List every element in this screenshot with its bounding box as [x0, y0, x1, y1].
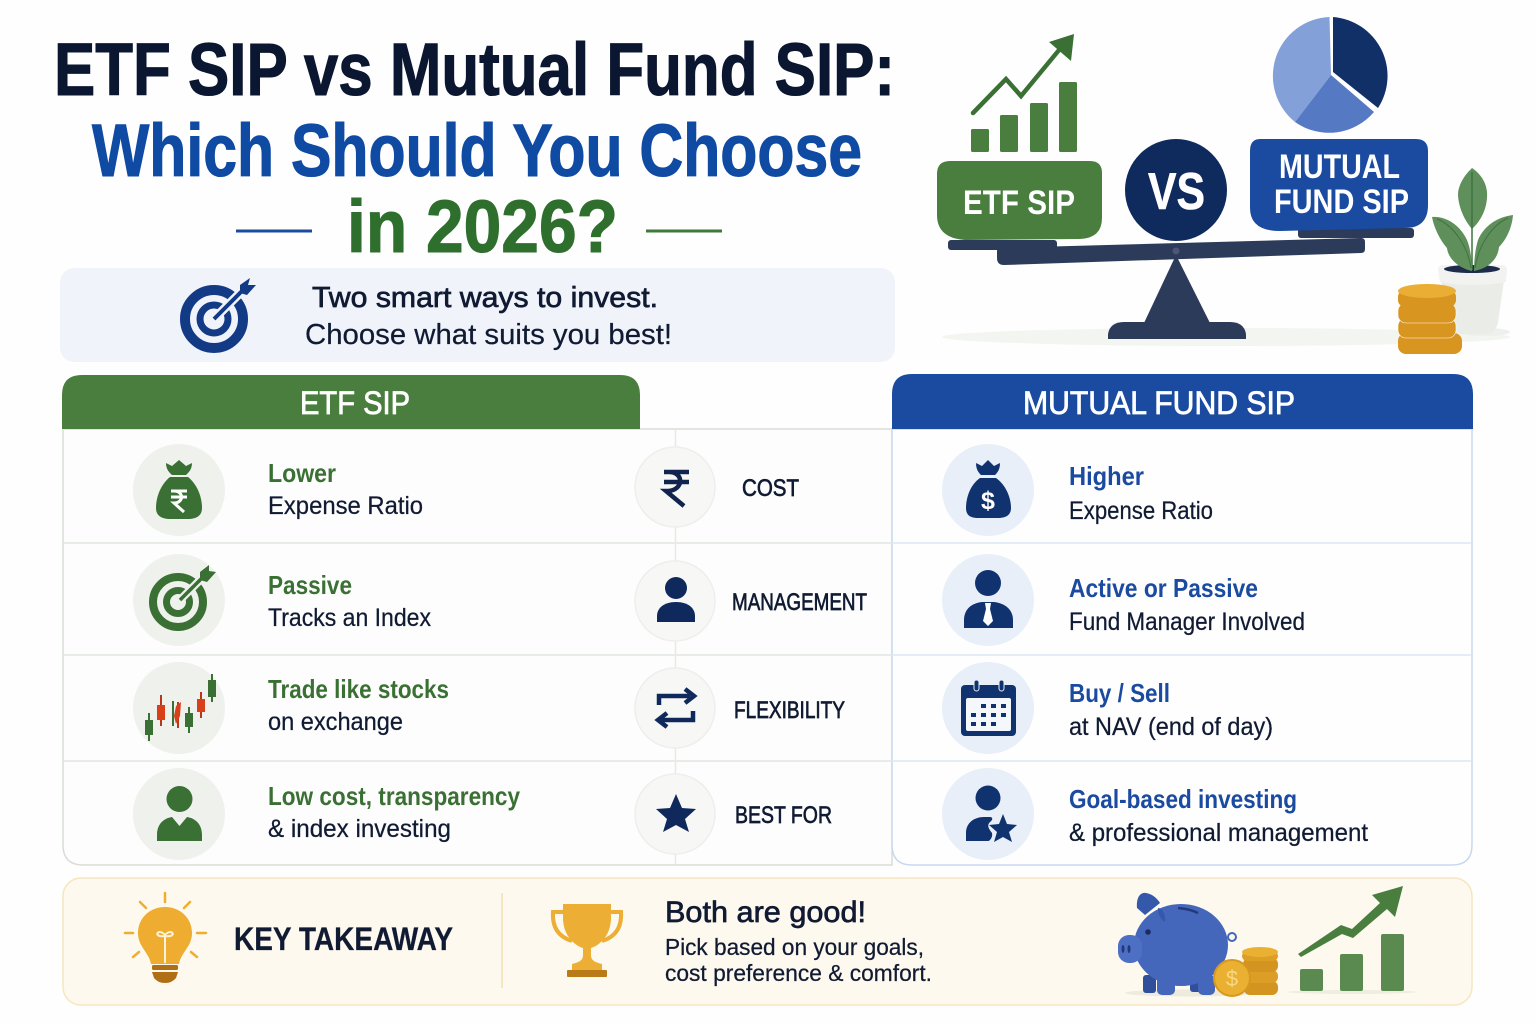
icon: candlesticks — [133, 662, 225, 754]
row: cost, mutual fund: Higher — [1069, 461, 1144, 491]
row: flexibility, mutual fund — [942, 662, 1273, 754]
heading: ETF SIP column — [62, 375, 640, 429]
scale beam — [948, 228, 1414, 339]
icon: rupee — [635, 447, 715, 527]
panel: key takeaway — [63, 878, 1472, 1005]
label: ETF SIP — [937, 161, 1102, 240]
row: management, mutual fund — [942, 554, 1305, 646]
panel: subtitle: Two smart ways to invest. — [312, 282, 658, 314]
title — [54, 28, 895, 268]
icon: fund manager — [942, 554, 1034, 646]
row: flexibility, ETF — [133, 662, 449, 754]
row: management, ETF — [133, 554, 431, 646]
heading: Mutual Fund SIP column — [892, 374, 1473, 429]
row: cost, ETF: Expense Ratio — [268, 492, 423, 520]
icon: rupee money bag — [133, 444, 225, 536]
row: cost, ETF: Lower — [268, 458, 336, 488]
icon: piggy bank — [1118, 893, 1255, 996]
label: Mutual Fund SIP: FUND SIP — [1274, 183, 1409, 221]
category: flexibility: FLEXIBILITY — [734, 697, 845, 724]
row: management, mutual fund: Active or Passive — [1069, 573, 1258, 603]
title: ETF SIP vs Mutual Fund SIP: — [54, 28, 895, 111]
icon: coin stack — [1398, 284, 1462, 354]
icon: calendar — [942, 662, 1034, 754]
title: Which Should You Choose — [92, 109, 862, 192]
row: cost, mutual fund — [942, 444, 1213, 536]
icon: light bulb — [125, 893, 206, 983]
row: cost, mutual fund: Expense Ratio — [1069, 497, 1213, 525]
icon: person — [133, 768, 225, 860]
row: cost, ETF — [133, 444, 423, 536]
heading: Mutual Fund SIP column: MUTUAL FUND SIP — [1023, 385, 1295, 421]
panel: key takeaway: cost preference & comfort. — [665, 960, 932, 986]
panel: subtitle — [60, 268, 895, 362]
icon: target — [133, 554, 225, 646]
row: flexibility, mutual fund: at NAV (end of day) — [1069, 713, 1273, 741]
heading: ETF SIP column: ETF SIP — [300, 385, 410, 421]
category: cost: COST — [742, 475, 799, 502]
panel: key takeaway: Pick based on your goals, — [665, 934, 924, 960]
label: Mutual Fund SIP: MUTUAL — [1279, 148, 1400, 186]
category: cost — [635, 447, 799, 527]
icon: dollar money bag — [942, 444, 1034, 536]
icon: coins — [1214, 947, 1278, 996]
icon: dollar money bag: $ — [981, 487, 995, 515]
badge: VS — [1125, 139, 1227, 241]
row: best for, ETF: & index investing — [268, 815, 451, 843]
row: management, ETF: Tracks an Index — [268, 604, 431, 632]
panel: key takeaway: Both are good! — [665, 896, 866, 929]
panel: key takeaway: KEY TAKEAWAY — [234, 921, 453, 957]
chart: pie — [1273, 17, 1388, 133]
category: flexibility — [635, 668, 845, 748]
icon: manager — [635, 561, 715, 641]
row: best for, mutual fund: & professional management — [1069, 819, 1368, 847]
icon: coins: $ — [1226, 966, 1238, 991]
category: management — [635, 561, 867, 641]
row: management, ETF: Passive — [268, 570, 352, 600]
category: management: MANAGEMENT — [732, 589, 867, 616]
icon: swap arrows — [635, 668, 715, 748]
row: best for, ETF — [133, 768, 520, 860]
row: best for, ETF: Low cost, transparency — [268, 781, 520, 811]
row: management, mutual fund: Fund Manager Involved — [1069, 608, 1305, 636]
icon: target — [185, 278, 256, 348]
label: Mutual Fund SIP — [1250, 139, 1428, 231]
row: flexibility, ETF: on exchange — [268, 708, 403, 736]
row: flexibility, mutual fund: Buy / Sell — [1069, 678, 1170, 708]
row: flexibility, ETF: Trade like stocks — [268, 674, 449, 704]
icon: trophy — [553, 904, 621, 977]
row: best for, mutual fund: Goal-based investing — [1069, 784, 1297, 814]
label: ETF SIP: ETF SIP — [963, 184, 1075, 222]
illustration: balance scale — [937, 17, 1513, 354]
chart: growth bars with arrow — [1287, 886, 1417, 994]
icon: plant — [1432, 168, 1513, 336]
category: best for: BEST FOR — [735, 802, 832, 829]
row: best for, mutual fund — [942, 768, 1368, 860]
icon: star — [635, 774, 715, 854]
panel: table frame — [63, 429, 1472, 865]
category: best for — [635, 774, 832, 854]
panel: subtitle: Choose what suits you best! — [305, 319, 672, 351]
badge: VS: VS — [1148, 163, 1205, 221]
title: in 2026? — [347, 185, 618, 268]
bar chart: ETF growth — [971, 34, 1077, 152]
icon: person with star — [942, 768, 1034, 860]
